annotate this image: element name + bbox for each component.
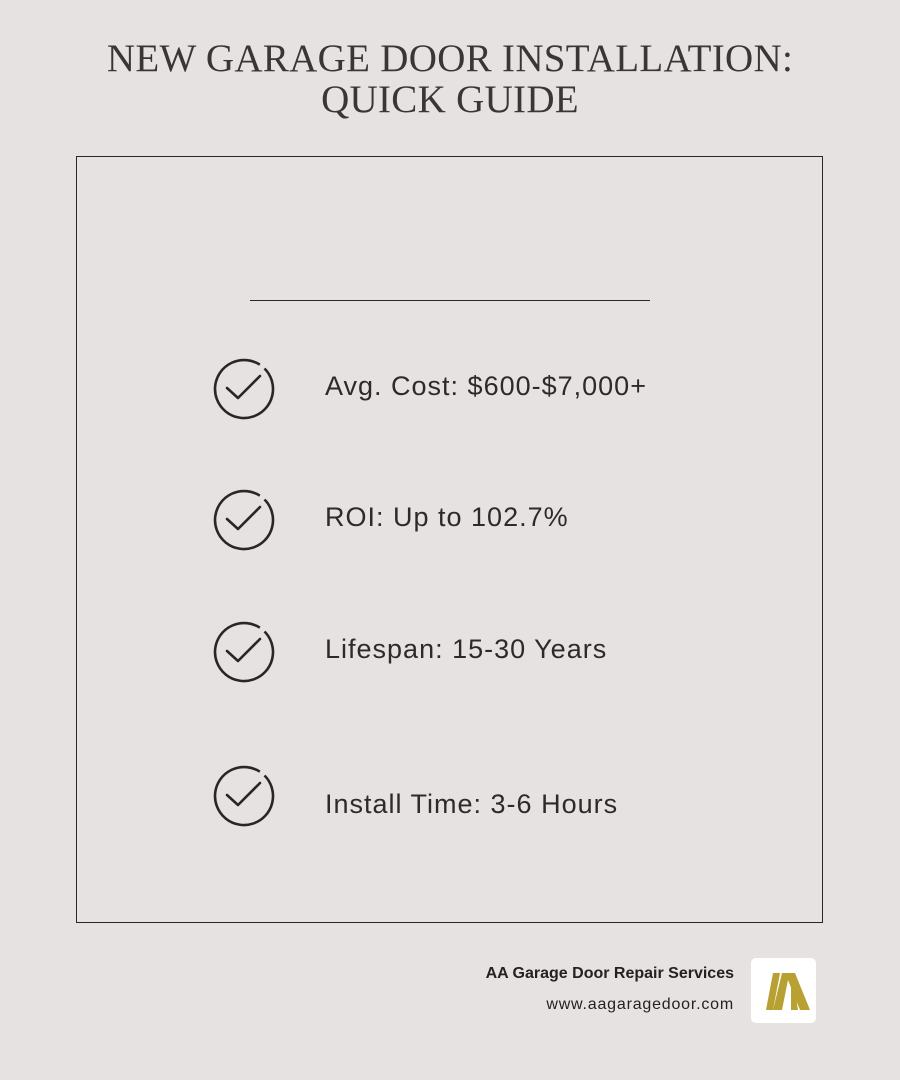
item: cost: Avg. Cost: $600-$7,000+ [325, 371, 647, 401]
icon: check [214, 358, 274, 420]
title [107, 37, 793, 121]
icon: check [214, 766, 274, 826]
item: lifespan: Lifespan: 15-30 Years [325, 634, 607, 664]
item: lifespan [214, 622, 607, 682]
icon: check [214, 622, 274, 682]
footer: company name: AA Garage Door Repair Services [486, 965, 734, 982]
logo [751, 958, 816, 1023]
title: QUICK GUIDE [321, 78, 579, 121]
item: roi: ROI: Up to 102.7% [325, 502, 569, 532]
item: install time [214, 766, 618, 826]
icon: check [214, 490, 274, 550]
footer: website: www.aagaragedoor.com [546, 996, 734, 1013]
item: roi [214, 490, 569, 550]
item: cost [214, 358, 647, 420]
title: NEW GARAGE DOOR INSTALLATION: [107, 37, 793, 80]
item: install time: Install Time: 3-6 Hours [325, 789, 618, 819]
panel: guide box [76, 156, 823, 923]
